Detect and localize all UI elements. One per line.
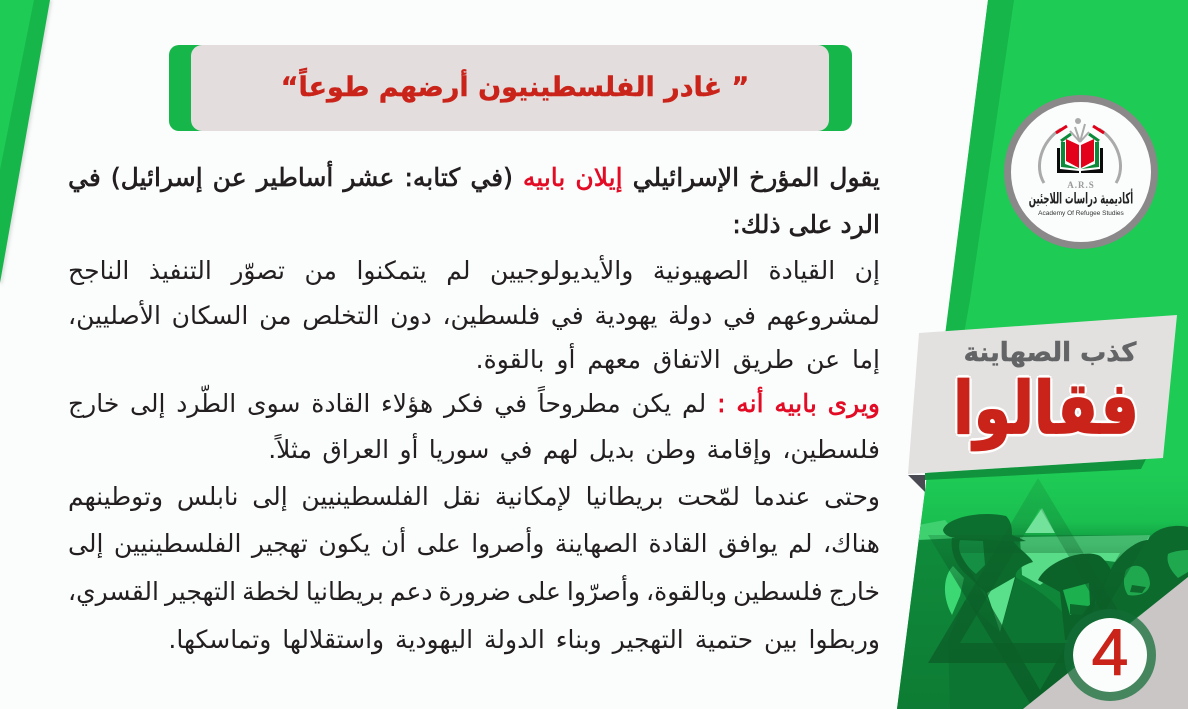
banner: dark fold triangle bbox=[908, 475, 925, 492]
line 2: الرد على ذلك: bbox=[732, 210, 880, 239]
banner: green fold bbox=[925, 459, 1146, 480]
line 6: ويرى بابيه أنه : لم يكن مطروحاً في فكر هؤلاء القادة سوى الطّرد إلى خارج bbox=[68, 389, 880, 418]
line 4: لمشروعهم في دولة يهودية في فلسطين، دون التخلص من السكان الأصليين، bbox=[68, 301, 880, 330]
light background between the men bbox=[1020, 535, 1150, 585]
line 5: إما عن طريق الاتفاق معهم أو بالقوة. bbox=[476, 345, 880, 374]
photo of crowd with star bbox=[890, 475, 1188, 709]
left man coat bbox=[949, 578, 1066, 698]
line 3: إن القيادة الصهيونية والأيديولوجيين لم يتمكنوا من تصوّر التنفيذ الناجح bbox=[68, 256, 880, 285]
number badge bbox=[1064, 609, 1156, 701]
logo text: Academy Of Refugee Studies bbox=[1038, 210, 1124, 217]
title bar bbox=[169, 45, 852, 131]
grey corner bbox=[1023, 577, 1188, 709]
logo text: A.R.S bbox=[1067, 180, 1095, 190]
title text: ” غادر الفلسطينيون أرضهم طوعاً“ bbox=[281, 72, 749, 103]
right men bbox=[1100, 526, 1188, 622]
left man hand bbox=[945, 566, 964, 615]
star of David bbox=[928, 478, 1150, 709]
banner title: فقالوا bbox=[953, 367, 1139, 451]
logo emblem: book bbox=[1038, 118, 1122, 184]
left man collar bbox=[987, 577, 1015, 632]
line 1: يقول المؤرخ الإسرائيلي إيلان بابيه (في كتابه: عشر أساطير عن إسرائيل) في bbox=[68, 163, 880, 192]
line 10: خارج فلسطين وبالقوة، وأصرّوا على ضرورة دعم بريطانيا لخطة التهجير القسري، bbox=[68, 577, 880, 606]
line 7: فلسطين، وإقامة وطن بديل لهم في سوريا أو العراق مثلاً. bbox=[268, 435, 880, 464]
line 8: وحتى عندما لمّحت بريطانيا لإمكانية نقل الفلسطينيين إلى نابلس وتوطينهم bbox=[68, 482, 880, 511]
middle man bbox=[1038, 553, 1115, 640]
line 11: وربطوا بين حتمية التهجير وبناء الدولة اليهودية واستقلالها وتماسكها. bbox=[168, 625, 880, 654]
title panel bbox=[191, 45, 829, 131]
left man hat bbox=[943, 514, 1026, 541]
logo text: أكاديمية دراسات اللاجئين bbox=[1029, 191, 1133, 209]
banner: grey panel bbox=[908, 315, 1177, 474]
left man head and beard bbox=[952, 538, 1033, 632]
logo text bbox=[1029, 180, 1133, 217]
left green corner bbox=[0, 0, 52, 284]
line 9: هناك، لم يوافق القادة الصهاينة وأصروا على أن يكون تهجير الفلسطينيين إلى bbox=[68, 529, 880, 558]
logo bbox=[1004, 95, 1158, 249]
number badge: 4 bbox=[1092, 615, 1128, 689]
right green panel bbox=[890, 0, 1188, 709]
banner heading: كذب الصهاينة bbox=[964, 338, 1136, 368]
